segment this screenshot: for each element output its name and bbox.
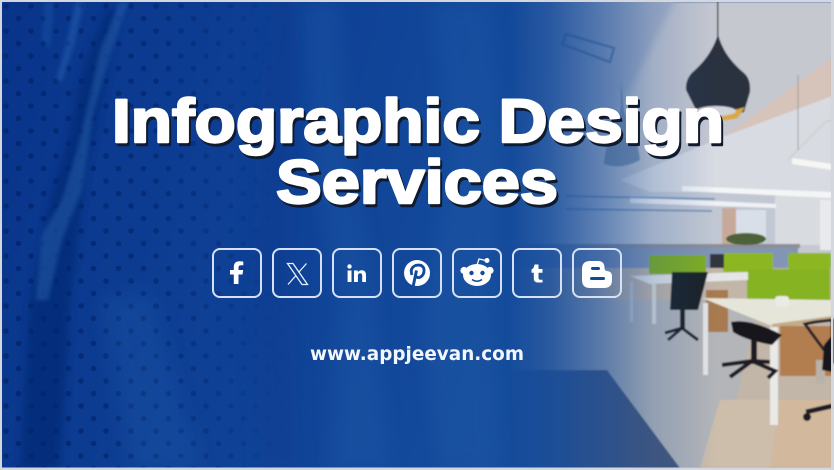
- peach beam: [725, 58, 832, 136]
- social icons row: [213, 249, 621, 297]
- ceiling: [526, 2, 831, 269]
- title shadow: [114, 90, 726, 219]
- reception counter: [500, 244, 800, 248]
- icon: linkedin: [333, 249, 381, 297]
- office photo: [526, 2, 834, 468]
- light strips: [682, 186, 832, 198]
- back wall: [662, 192, 775, 202]
- icon: X: [273, 249, 321, 297]
- icon: facebook: [213, 249, 261, 297]
- green panels: [649, 255, 706, 274]
- back desk: [630, 272, 748, 284]
- icon: reddit: [453, 249, 501, 297]
- pendant lamp: [686, 2, 750, 121]
- title: [112, 87, 726, 219]
- title text: Services: [276, 148, 558, 216]
- icon: pinterest: [393, 249, 441, 297]
- icon: tumblr: [513, 249, 561, 297]
- faded photo details on blue: [562, 34, 715, 211]
- dark wood rug: [532, 370, 680, 468]
- title text: Infographic Design: [112, 87, 724, 155]
- front chair: [731, 321, 782, 345]
- title text: [112, 87, 724, 216]
- back chair: [670, 272, 708, 330]
- title shadow: Services: [278, 151, 560, 219]
- front desk: [702, 298, 832, 326]
- floor: [563, 267, 831, 401]
- title shadow: Infographic Design: [114, 90, 726, 158]
- lower ceiling: [622, 96, 831, 192]
- website url: www.appjeevan.com: [310, 343, 524, 365]
- icon: blogger: [573, 249, 621, 297]
- right chair: [805, 320, 832, 360]
